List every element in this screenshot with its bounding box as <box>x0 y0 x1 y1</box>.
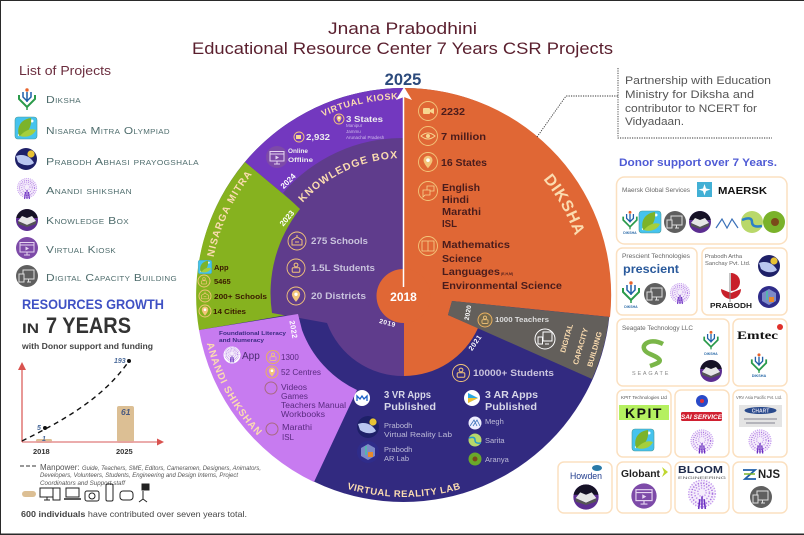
item: Knowledge Box <box>16 209 129 231</box>
stat: online offline <box>266 146 313 168</box>
legend: manpower: Manpower: <box>40 463 80 472</box>
stat: ar apps: 3 AR Apps <box>485 390 538 401</box>
sector: nisarga mitra <box>196 162 404 330</box>
item: Anandi shikshan: Anandi shikshan <box>46 185 132 197</box>
panel: digital capacity stats <box>478 313 555 349</box>
chart: growth 2018 to 2025: 2018 <box>33 447 50 456</box>
stat: subjects: Mathematics <box>442 239 510 251</box>
chart: growth 2018 to 2025: 1 <box>42 436 46 443</box>
stat: vr apps: 3 VR Apps <box>384 390 431 401</box>
sector: virtual reality lab <box>196 88 610 502</box>
donor: prescient <box>616 248 697 315</box>
year labels: 2021 <box>468 334 484 352</box>
stat: subjects: Science <box>442 253 482 265</box>
text: contributors: 600 individuals have contributed over seven years total. <box>21 509 247 519</box>
heading: list of projects: List of Projects <box>19 63 112 78</box>
stat: vr apps <box>354 390 436 413</box>
stat: languages: Marathi <box>282 423 312 432</box>
icon: monitor <box>535 329 555 349</box>
chart: growth 2018 to 2025: 193 <box>114 358 126 365</box>
donor: seagate: Seagate Technology LLC <box>622 325 693 332</box>
item: Diksha <box>19 88 81 110</box>
legend: manpower: Developers, Volunteers, Students, Engineering and Design Interns, Project <box>40 473 238 479</box>
heading: donor support: Donor support over 7 Years. <box>619 157 777 169</box>
donor: njs <box>733 462 787 513</box>
label: virtual kiosk: VIRTUAL KIOSK <box>320 92 398 116</box>
item: prabodh virtual reality lab: Prabodh <box>384 421 412 430</box>
title: Educational Resource Center 7 Years CSR Projects <box>192 39 613 58</box>
donor: kpit: KPIT <box>625 405 663 421</box>
year labels <box>278 171 484 352</box>
item: Prabodh Abhasi prayogshala: Prabodh Abhasi prayogshala <box>46 156 199 168</box>
panel: list of projects <box>15 63 199 287</box>
title: Jnana Prabodhini <box>328 19 477 38</box>
callout: partnership: contributor to NCERT for <box>625 103 757 115</box>
stat: ar apps <box>464 390 538 413</box>
callout: partnership: Vidyadaan. <box>625 116 684 128</box>
stat: resources: Games <box>281 392 308 401</box>
heading: in 7 years: 7 YEARS <box>46 313 131 338</box>
item: Prabodh Abhasi prayogshala <box>15 148 199 170</box>
donor: maersk: DIKSHA <box>623 231 637 235</box>
stat: 3 states <box>334 114 385 140</box>
heading: foundational literacy: and Numeracy <box>219 338 265 344</box>
panel: nisarga mitra stats <box>198 260 267 317</box>
stat: resources: Workbooks <box>281 410 325 419</box>
year labels: 2019 <box>378 318 396 329</box>
item: sarita <box>468 434 505 446</box>
donor: vrv: VRV Asia Pacific Pvt. Ltd. <box>736 395 782 400</box>
stat: resources: Videos <box>281 383 307 392</box>
label: digital capacity building: DIGITAL <box>558 323 575 354</box>
stat: subjects: Environmental Science <box>442 280 562 292</box>
donor: globant: Globant <box>621 468 660 480</box>
panel: virtual kiosk stats <box>266 114 385 168</box>
donor: prescient: prescient <box>623 262 679 276</box>
stat: 2232 <box>418 102 465 120</box>
item: prabodh virtual reality lab <box>357 416 452 439</box>
item: Virtual Kiosk: Virtual Kiosk <box>46 244 116 256</box>
stat: languages: ISL <box>442 218 458 230</box>
stat: subjects <box>418 236 562 292</box>
donor: bloom <box>675 462 729 513</box>
donor: sai service <box>675 390 729 457</box>
item: Nisarga Mitra Olympiad: Nisarga Mitra Olympiad <box>46 125 170 137</box>
label: digital capacity building: CAPACITY <box>571 327 590 366</box>
donor: prabodh <box>702 248 787 315</box>
stat: vr apps: Published <box>384 402 436 413</box>
item: Digital Capacity Building: Digital Capacity Building <box>46 272 177 284</box>
stat: languages: English <box>442 182 480 194</box>
sector: virtual kiosk <box>245 88 404 295</box>
stat: districts: 20 Districts <box>311 291 366 301</box>
year labels: 2020 <box>464 304 473 321</box>
donor: prescient: Prescient Technologies <box>622 253 690 260</box>
chart: growth 2018 to 2025: 61 <box>121 407 131 417</box>
stat: languages: Hindi <box>442 194 469 206</box>
stat: 16 states <box>418 152 487 172</box>
icons: resources <box>22 484 149 502</box>
stat: languages <box>266 423 312 442</box>
year labels: 2023 <box>278 208 297 228</box>
stat: online offline: Offline <box>288 157 313 164</box>
item: Diksha: Diksha <box>46 94 81 106</box>
label: virtual reality lab: VIRTUAL REALITY LAB <box>348 482 460 497</box>
item: Digital Capacity Building <box>16 265 177 287</box>
stat: 3 states: 3 States <box>346 114 383 124</box>
donor: maersk: Maersk Global Services <box>622 187 690 194</box>
stat: resources <box>265 382 346 419</box>
label: digital capacity building <box>558 323 604 368</box>
donor: prabodh: Prabodh Artha <box>705 254 743 260</box>
stat: languages: Marathi <box>442 206 481 218</box>
stat: 3 states: Jammu <box>346 129 361 134</box>
item: prabodh virtual reality lab: Virtual Reality Lab <box>384 430 452 439</box>
stat: students: 1.5L Students <box>311 263 375 273</box>
stat: app: App <box>214 263 229 272</box>
item: Anandi shikshan <box>18 178 132 199</box>
stat: ar apps: Published <box>485 402 537 413</box>
donor: vrv <box>733 390 787 457</box>
legend: manpower: Coordinators and Support staff <box>40 481 126 487</box>
donor: emtec: Emtec <box>737 328 779 342</box>
sector: digital capacity building <box>448 301 609 379</box>
donor: emtec: DIKSHA <box>752 374 767 378</box>
year labels: 2024 <box>279 171 298 191</box>
item: megh <box>468 416 504 430</box>
label: diksha: DIKSHA <box>544 173 584 236</box>
curved sector labels <box>318 99 404 119</box>
stat: 5465: 5465 <box>214 277 231 286</box>
label: digital capacity building: BUILDING <box>585 330 604 368</box>
subheading: with Donor support and funding <box>21 342 153 351</box>
stat: schools: 200+ Schools <box>214 292 267 301</box>
chart: growth 2018 to 2025: 2025 <box>116 447 133 456</box>
donor: njs: NJS <box>758 469 780 481</box>
stat: students: 10000+ Students <box>473 368 554 378</box>
title <box>192 19 613 58</box>
sector: diksha <box>404 88 611 376</box>
legend: manpower: Guide, Teachers, SME, Editors, Cameramen, Designers, Animators, <box>82 466 261 472</box>
stat: 2232: 2232 <box>441 106 465 118</box>
stat: schools: 275 Schools <box>311 236 368 246</box>
heading: foundational literacy <box>219 331 287 344</box>
item: aranya <box>468 452 510 466</box>
chart: project wheel <box>196 71 612 502</box>
stat: languages <box>418 182 481 230</box>
callout: partnership: Partnership with Education <box>625 75 771 87</box>
stat: 7 million: 7 million <box>441 131 486 143</box>
item: Nisarga Mitra Olympiad <box>15 117 170 139</box>
item: megh: Megh <box>485 417 504 426</box>
item: Knowledge Box: Knowledge Box <box>46 215 129 227</box>
donor: kpit <box>617 390 671 457</box>
item: Virtual Kiosk <box>16 237 116 259</box>
item: prabodh ar lab <box>357 441 412 463</box>
stat: subjects: (E,H,M) <box>501 272 513 276</box>
label: nisarga mitra: NISARGA MITRA <box>207 172 252 257</box>
item: sarita: Sarita <box>485 436 505 445</box>
donor: seagate: DIKSHA <box>704 352 718 356</box>
chart: growth 2018 to 2025 <box>18 358 164 456</box>
donor: seagate <box>617 319 729 386</box>
stat: 7 million <box>418 126 486 146</box>
stat: 16 states: 16 States <box>441 157 487 169</box>
sector: anandi shikshan <box>199 314 357 482</box>
panel: diksha stats <box>418 102 562 292</box>
item: prabodh ar lab: AR Lab <box>384 454 409 463</box>
donor: vrv: CHART <box>752 408 769 414</box>
donor: maersk: MAERSK <box>718 185 767 197</box>
label: anandi shikshan: ANANDI SHIKSHAN <box>206 344 262 436</box>
item: prabodh ar lab: Prabodh <box>384 445 412 454</box>
stat: 2,932: 2,932 <box>306 132 330 142</box>
arrow: timeline <box>396 87 412 287</box>
donor: howden <box>558 462 612 513</box>
panel: donors <box>558 177 787 513</box>
centre: 2018 <box>376 269 430 323</box>
panel: anandi shikshan stats <box>219 331 346 442</box>
sector: knowledge box <box>271 138 404 376</box>
stat: 3 states: Manipur <box>346 123 363 128</box>
stat: 1000 teachers: 1000 Teachers <box>495 317 549 324</box>
callout: partnership: Ministry for Diksha and <box>625 89 754 101</box>
legend: manpower <box>20 463 261 487</box>
chart: growth 2018 to 2025: 5 <box>37 425 41 432</box>
centre: 2018: 2018 <box>390 290 417 304</box>
donor: bloom: BLOOM <box>678 465 723 476</box>
heading: resources growth: RESOURCES GROWTH <box>22 296 164 312</box>
donor: prescient: DIKSHA <box>624 305 638 309</box>
donor: bloom: ENGINEERING <box>678 476 726 480</box>
stat: 52 centres: 52 Centres <box>281 368 321 377</box>
stat: subjects: Languages <box>442 266 500 278</box>
heading: foundational literacy: Foundational Literacy <box>219 331 287 337</box>
label: 2025: 2025 <box>385 71 421 89</box>
stat: online offline: Online <box>288 148 308 155</box>
stat: students <box>452 364 554 382</box>
donor: prabodh: PRABODH <box>710 301 752 310</box>
stat: 1300: 1300 <box>281 353 299 362</box>
label: knowledge box: KNOWLEDGE BOX <box>298 151 398 202</box>
heading: in 7 years: IN <box>22 320 39 336</box>
donor: emtec <box>733 319 787 386</box>
stat: app: App <box>242 351 260 362</box>
panel: virtual reality lab stats <box>354 364 554 466</box>
donor: kpit: KPIT Technologies Ltd <box>621 395 667 400</box>
panel: knowledge box stats <box>287 232 375 305</box>
item: aranya: Aranya <box>485 455 510 464</box>
donor: sai service: SAI SERVICE <box>681 414 723 421</box>
donor: prabodh: Sanchay Pvt. Ltd. <box>705 261 751 267</box>
donor: maersk <box>616 177 787 244</box>
stat: 3 states: Arunachal Pradesh <box>346 135 385 140</box>
donor: globant <box>617 462 671 513</box>
stat: languages: ISL <box>282 433 295 442</box>
panel: resources growth <box>18 296 261 519</box>
donor: seagate: SEAGATE <box>632 371 670 377</box>
donor: howden: Howden <box>570 471 602 482</box>
stat: resources: Teachers Manual <box>281 401 346 410</box>
stat: cities: 14 Cities <box>213 307 246 316</box>
callout: partnership <box>537 68 772 138</box>
year labels: 2022 <box>287 320 299 339</box>
